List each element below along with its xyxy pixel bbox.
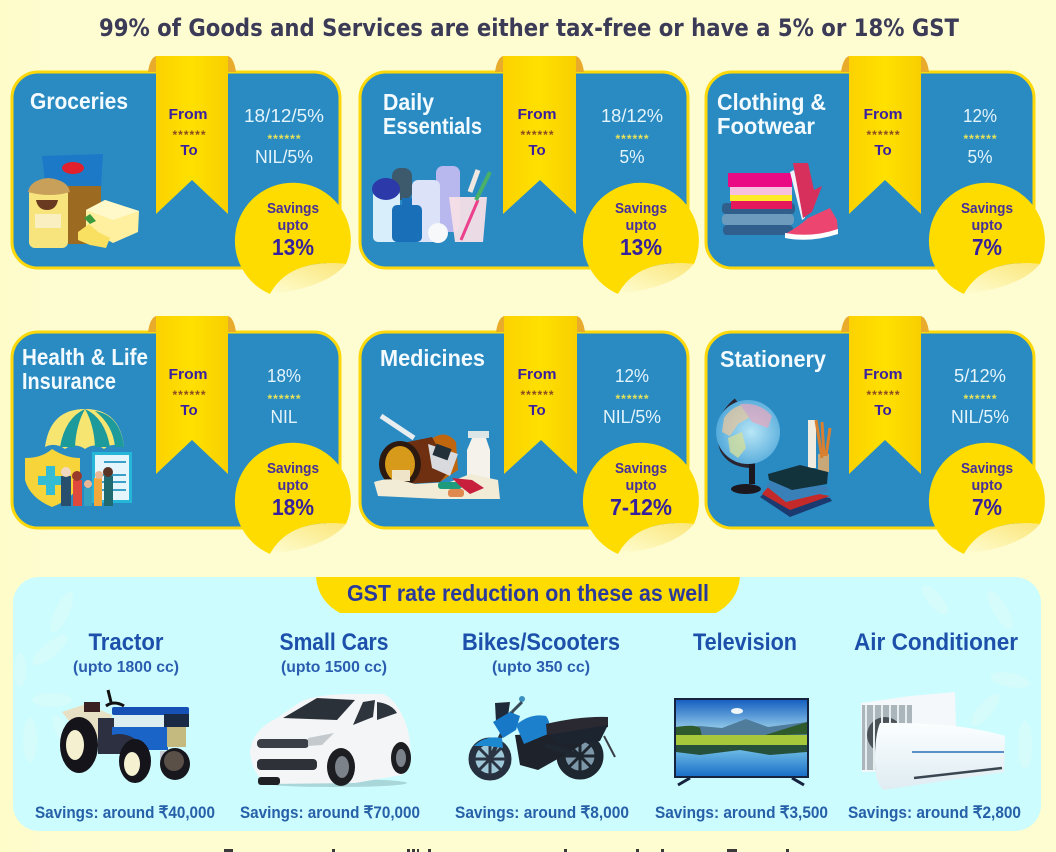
panel: clothing and footwear xyxy=(706,56,1045,294)
item: bikes and scooters xyxy=(455,629,629,822)
heading: daily essentials: Essentials xyxy=(383,113,482,139)
ribbon labels: from to: From xyxy=(518,366,556,383)
savings sticker: health and life insurance xyxy=(235,443,351,554)
ribbon labels: from to: ****** xyxy=(866,128,900,142)
ribbon labels: from to: ****** xyxy=(520,128,554,142)
rates: groceries: NIL/5% xyxy=(255,147,313,167)
icon: globe books pencils xyxy=(716,400,832,517)
savings sticker: groceries xyxy=(235,183,351,294)
ribbon labels: from to: From xyxy=(864,366,902,383)
savings sticker: health and life insurance: 18% xyxy=(272,494,314,520)
rates: clothing and footwear: 12% xyxy=(963,106,997,126)
ribbon labels: from to xyxy=(168,106,208,159)
icon: air conditioner xyxy=(861,692,1005,790)
item: air conditioner xyxy=(848,629,1021,822)
icon: clothes and shoes xyxy=(722,163,838,240)
item: tractor: (upto 1800 cc) xyxy=(73,659,179,676)
item: bikes and scooters: Savings: around ₹8,000 xyxy=(455,803,629,822)
heading: clothing and footwear: Clothing & xyxy=(717,89,826,115)
savings sticker: clothing and footwear xyxy=(929,183,1045,294)
savings sticker: clothing and footwear: Savings xyxy=(961,200,1013,217)
ribbon labels: from to: From xyxy=(518,106,556,123)
ribbon labels: from to: From xyxy=(168,366,208,383)
panel: groceries xyxy=(12,56,351,294)
ribbon labels: from to: To xyxy=(180,402,198,419)
item: tractor: Savings: around ₹40,000 xyxy=(35,803,215,822)
rates: medicines: NIL/5% xyxy=(603,407,661,427)
item: bikes and scooters: (upto 350 cc) xyxy=(492,659,590,676)
rates: daily essentials: 18/12% xyxy=(601,106,663,126)
heading: health and life insurance xyxy=(22,344,148,394)
savings sticker: stationery xyxy=(929,443,1045,554)
ribbon labels: from to xyxy=(864,366,902,419)
rates: stationery xyxy=(951,366,1009,427)
item: tractor: Tractor xyxy=(88,629,164,656)
icon: toiletries xyxy=(372,166,490,243)
icon: motorbike xyxy=(472,696,615,777)
rates: groceries: ****** xyxy=(268,132,301,146)
ribbon labels: from to: ****** xyxy=(520,388,554,402)
cropped text line at bottom edge xyxy=(224,849,789,852)
heading: stationery: Stationery xyxy=(720,346,826,372)
item: air conditioner: Savings: around ₹2,800 xyxy=(848,803,1021,822)
ribbon labels: from to: ****** xyxy=(866,388,900,402)
item: small cars: Small Cars xyxy=(280,629,388,656)
savings sticker: daily essentials xyxy=(583,183,699,294)
icon: medicine bottle and pills xyxy=(374,416,500,499)
rates: stationery: ****** xyxy=(964,392,997,406)
title: 99% of Goods and Services are either tax-free or have a 5% or 18% GST xyxy=(99,14,960,42)
rates: clothing and footwear: 5% xyxy=(968,147,992,167)
item: television: Television xyxy=(693,629,797,656)
savings sticker: medicines: Savings xyxy=(615,460,667,477)
rates: daily essentials: ****** xyxy=(616,132,649,146)
panel: stationery xyxy=(706,316,1045,554)
panel: medicines xyxy=(360,316,699,554)
savings sticker: health and life insurance: upto xyxy=(278,477,308,494)
item: small cars xyxy=(240,629,420,822)
savings sticker: clothing and footwear: upto xyxy=(972,217,1002,234)
icon: tractor xyxy=(60,690,190,783)
ribbon labels: from to xyxy=(518,106,556,159)
rates: daily essentials: 5% xyxy=(620,147,644,167)
rates: health and life insurance: NIL xyxy=(270,407,298,427)
item: television xyxy=(655,629,828,822)
ribbon labels: from to: ****** xyxy=(172,128,206,142)
ribbon labels: from to: To xyxy=(528,142,546,159)
icon: car xyxy=(250,694,411,787)
banner: gst rate reduction: GST rate reduction on these as well xyxy=(347,580,709,606)
heading: clothing and footwear: Footwear xyxy=(717,113,815,139)
rates: daily essentials xyxy=(601,106,663,167)
savings sticker: stationery: upto xyxy=(972,477,1002,494)
savings sticker: medicines xyxy=(583,443,699,554)
item: bikes and scooters: Bikes/Scooters xyxy=(462,629,620,656)
item: small cars: Savings: around ₹70,000 xyxy=(240,803,420,822)
rates: clothing and footwear xyxy=(963,106,997,167)
savings sticker: groceries: 13% xyxy=(272,234,314,260)
savings sticker: groceries: upto xyxy=(278,217,308,234)
ribbon labels: from to: To xyxy=(180,142,198,159)
ribbon labels: from to: ****** xyxy=(172,388,206,402)
item: tractor xyxy=(35,629,215,822)
savings sticker: health and life insurance: Savings xyxy=(267,460,319,477)
savings sticker: stationery: 7% xyxy=(972,494,1002,520)
icon: ghee pasta butter xyxy=(28,154,139,248)
rates: clothing and footwear: ****** xyxy=(964,132,997,146)
savings sticker: clothing and footwear: 7% xyxy=(972,234,1002,260)
rates: stationery: NIL/5% xyxy=(951,407,1009,427)
rates: groceries: 18/12/5% xyxy=(244,106,324,126)
ribbon labels: from to: To xyxy=(874,142,892,159)
savings sticker: daily essentials: Savings xyxy=(615,200,667,217)
savings sticker: daily essentials: 13% xyxy=(620,234,662,260)
rates: stationery: 5/12% xyxy=(954,366,1006,386)
item: small cars: (upto 1500 cc) xyxy=(281,659,387,676)
ribbon labels: from to xyxy=(864,106,902,159)
rates: health and life insurance: 18% xyxy=(267,366,301,386)
savings sticker: stationery: Savings xyxy=(961,460,1013,477)
heading: groceries: Groceries xyxy=(30,88,128,114)
item: television: Savings: around ₹3,500 xyxy=(655,803,828,822)
ribbon labels: from to: From xyxy=(168,106,208,123)
banner: gst rate reduction xyxy=(316,577,740,613)
heading: health and life insurance: Health & Life xyxy=(22,344,148,370)
ribbon labels: from to: From xyxy=(864,106,902,123)
ribbon labels: from to xyxy=(518,366,556,419)
heading: daily essentials xyxy=(383,89,482,139)
ribbon labels: from to: To xyxy=(528,402,546,419)
ribbon labels: from to xyxy=(168,366,208,419)
item: air conditioner: Air Conditioner xyxy=(854,629,1018,656)
heading: clothing and footwear xyxy=(717,89,826,139)
icon: umbrella shield family xyxy=(25,409,132,507)
rates: health and life insurance: ****** xyxy=(268,392,301,406)
panel: health and life insurance xyxy=(12,316,351,554)
rates: medicines xyxy=(603,366,661,427)
panel: gst rate reduction xyxy=(13,577,1041,831)
icon: television xyxy=(674,698,809,785)
rates: groceries xyxy=(244,106,324,167)
panel: daily essentials xyxy=(360,56,699,294)
ribbon labels: from to: To xyxy=(874,402,892,419)
rates: medicines: ****** xyxy=(616,392,649,406)
savings sticker: medicines: upto xyxy=(626,477,656,494)
heading: daily essentials: Daily xyxy=(383,89,434,115)
savings sticker: daily essentials: upto xyxy=(626,217,656,234)
rates: medicines: 12% xyxy=(615,366,649,386)
savings sticker: medicines: 7-12% xyxy=(610,494,672,520)
savings sticker: groceries: Savings xyxy=(267,200,319,217)
heading: health and life insurance: Insurance xyxy=(22,368,116,394)
rates: health and life insurance xyxy=(267,366,301,427)
heading: medicines: Medicines xyxy=(380,345,485,371)
